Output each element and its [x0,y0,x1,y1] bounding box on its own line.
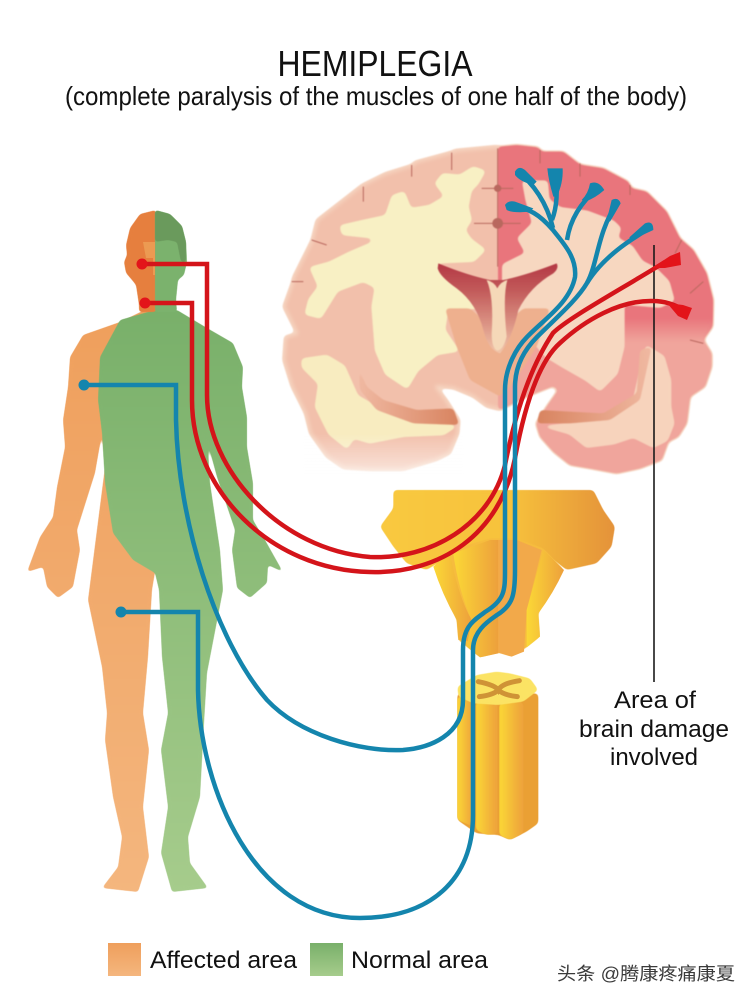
bottom left fade [303,433,463,475]
red nerve endings [136,252,692,320]
central fissure and folds [292,148,703,343]
basal nuclei [445,308,550,397]
spinal centre-right column [499,702,523,840]
head affected half [124,210,156,312]
medulla left column [433,553,472,642]
brain outline base [283,145,713,473]
ventricles [438,263,557,353]
brain cross-section [283,140,718,477]
spinal left column [457,697,473,827]
pointer line for damaged area [653,245,655,682]
normal side body [98,310,283,892]
left lower white matter [303,357,453,447]
left white matter [307,168,483,387]
watermark: 头条 @腾康疼痛康夏 [557,964,735,984]
legend swatch: affected [108,943,141,976]
human figure [27,210,283,892]
right lateral band [537,347,652,423]
brainstem [380,490,615,657]
medulla backing [433,538,564,657]
face affected highlight [143,242,155,275]
affected side body [27,305,155,892]
medulla right column [527,550,564,647]
label: brain damage area: Area of [614,687,696,714]
right white matter [503,182,673,390]
spinal column back [457,693,538,840]
lower red nerve [146,301,680,572]
red motor nerves [142,262,680,572]
subtitle: (complete paralysis of the muscles of one half of the body) [65,81,687,111]
medulla centre-left column [453,540,498,657]
blue nerve start dots [78,380,126,618]
head normal half [155,210,187,312]
right hemisphere damaged tint [498,140,718,477]
label: brain damage area [579,687,729,771]
legend swatch: normal [310,943,343,976]
blue nerve endings [505,168,653,240]
legend label: normal: Normal area [351,947,489,974]
label: brain damage area: involved [610,744,698,771]
spinal cord top [457,672,538,705]
right lower white matter [547,347,673,447]
central stem [487,280,507,351]
upper red nerve [142,262,665,557]
blue nerve to leg [121,203,617,918]
left lateral band [358,367,459,425]
spinal cord [457,672,538,840]
upper cortical branches [518,172,553,228]
spinal cord grey matter [478,681,519,697]
hair normal side [155,210,186,262]
spinal centre-left column [476,702,497,835]
blue nerves [84,172,650,918]
medulla centre-right column [498,540,542,657]
legend [108,943,489,976]
legend label: affected: Affected area [150,947,298,974]
blue nerve to arm [84,205,575,750]
title: HEMIPLEGIA [278,43,472,84]
label: brain damage area: brain damage [579,716,729,743]
pons [380,490,615,570]
